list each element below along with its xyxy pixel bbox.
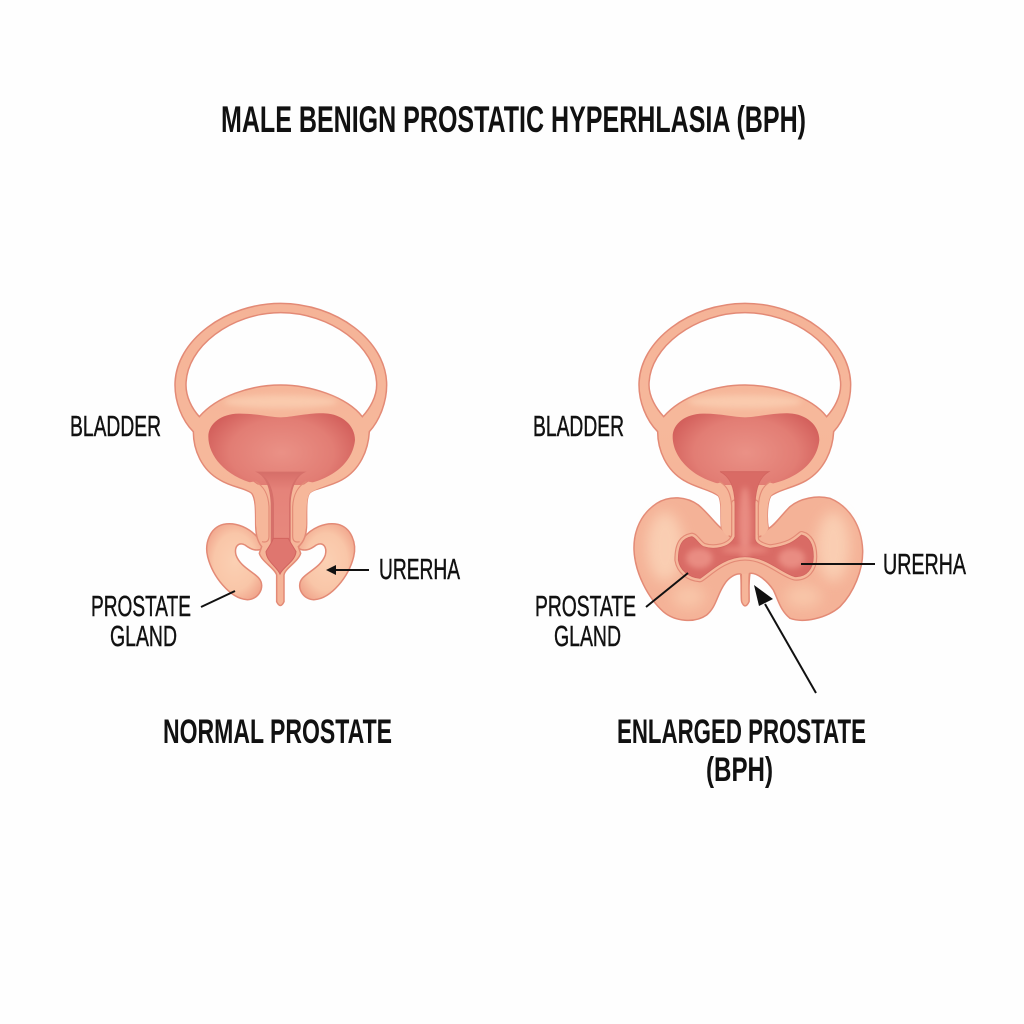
right prostate lobe xyxy=(298,524,355,600)
lobe highlight lower right xyxy=(785,585,822,608)
pointer line: prostate gland xyxy=(201,591,235,607)
bladder wall and neck xyxy=(639,303,851,537)
heading: normal prostate: NORMAL PROSTATE xyxy=(163,713,392,751)
label: prostate gland: GLAND xyxy=(110,621,177,653)
enlarged urethra lumen xyxy=(678,472,813,578)
bladder highlight xyxy=(688,395,802,408)
label: prostate gland: PROSTATE xyxy=(91,591,191,623)
left prostate lobe xyxy=(207,524,263,600)
lobe highlight lower left xyxy=(672,585,705,608)
heading: enlarged prostate: ENLARGED PROSTATE xyxy=(617,713,866,751)
urethra neck xyxy=(255,472,307,543)
pointer line: prostate gland xyxy=(646,573,688,607)
enlarged prostate lobes xyxy=(634,497,863,620)
panel: enlarged prostate xyxy=(533,303,966,789)
label: urerha: URERHA xyxy=(379,554,460,586)
label: prostate gland: GLAND xyxy=(554,621,621,653)
infographic canvas xyxy=(71,105,966,788)
bladder lumen xyxy=(208,413,355,485)
neck contour xyxy=(719,481,771,535)
label: prostate gland: PROSTATE xyxy=(535,591,636,623)
prostatic urethra xyxy=(266,538,296,574)
urethra channel xyxy=(262,474,300,540)
urethra wall contour xyxy=(255,481,306,542)
urethra band outline xyxy=(678,503,813,578)
bladder highlight xyxy=(224,395,337,408)
urethra walls xyxy=(235,482,327,542)
lobe highlight left xyxy=(647,512,683,582)
heading: enlarged prostate: (BPH) xyxy=(706,751,773,789)
diagram: enlarged prostate anatomy xyxy=(634,303,863,620)
pointer line: urerha xyxy=(801,563,875,565)
label: bladder: BLADDER xyxy=(533,411,624,443)
tail of urethra xyxy=(741,573,749,606)
neck walls xyxy=(702,483,788,536)
label: bladder: BLADDER xyxy=(70,411,161,443)
heading: enlarged prostate xyxy=(617,713,866,789)
panel: normal prostate xyxy=(70,303,460,751)
urethra lumen shading xyxy=(686,487,805,568)
arrow: enlargement pointer xyxy=(754,585,816,693)
label: prostate gland xyxy=(91,591,191,653)
diagram: normal prostate anatomy xyxy=(175,303,387,605)
lobe highlight right xyxy=(817,512,850,582)
label: prostate gland xyxy=(535,591,636,653)
urethra band xyxy=(678,503,813,578)
bladder lumen xyxy=(673,413,819,485)
label: urerha: URERHA xyxy=(883,549,966,581)
arrow: urerha pointer xyxy=(326,565,369,575)
bladder wall and urethra tube xyxy=(175,303,387,605)
